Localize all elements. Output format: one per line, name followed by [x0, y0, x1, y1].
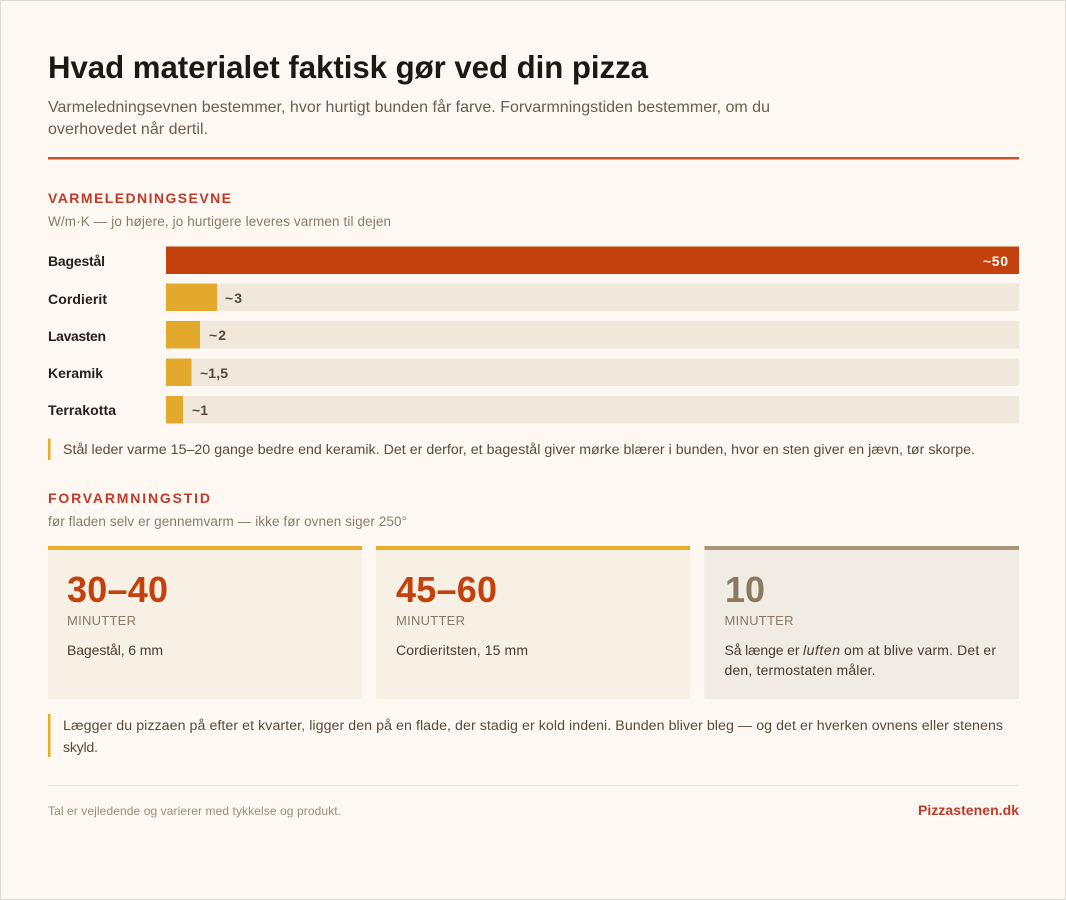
subtitle: Varmeledningsevnen bestemmer, hvor hurtigt bunden får farve. Forvarmningstiden bestemmer, om du: [48, 98, 770, 116]
subtitle: [48, 98, 770, 138]
panel: cordieritsten 45–60 minutter: 45–60: [396, 569, 497, 610]
bar row: Bagestål: [48, 246, 1019, 274]
callout: lægger du pizzaen på: skyld.: [63, 740, 98, 756]
bar chart: varmeledningsevne: [48, 246, 1019, 424]
panel: bagestål 30–40 minutter: MINUTTER: [67, 613, 136, 628]
panel: luften 10 minutter: den, termostaten måler.: [724, 662, 876, 678]
panel: luften 10 minutter: MINUTTER: [724, 613, 794, 628]
panel: luften 10 minutter: Så længe er: [724, 642, 800, 658]
section subtitle: forvarmningstid: før fladen selv er gennemvarm — ikke før ovnen siger 250°: [48, 514, 407, 529]
bar row: Keramik: ~1,5: [200, 365, 228, 381]
panel: cordieritsten 45–60 minutter: MINUTTER: [396, 613, 465, 628]
panel: luften 10 minutter: [704, 546, 1019, 699]
panel: bagestål 30–40 minutter: [48, 546, 362, 699]
panel: cordieritsten 45–60 minutter: Cordieritsten, 15 mm: [396, 642, 528, 658]
bar row: Cordierit: [48, 284, 1019, 311]
bar row: Bagestål: ~50: [983, 253, 1008, 269]
section subtitle: varmeledningsevne: W/m·K — jo højere, jo hurtigere leveres varmen til dejen: [48, 214, 391, 229]
section heading: forvarmningstid: FORVARMNINGSTID: [48, 490, 210, 506]
panel: luften 10 minutter: luften: [803, 642, 840, 658]
footer note: Tal er vejledende og varierer med tykkelse og produkt.: [48, 804, 341, 818]
subtitle: overhovedet når dertil.: [48, 120, 208, 138]
footer brand: Pizzastenen.dk: [918, 802, 1019, 818]
panel: luften 10 minutter: 10: [725, 569, 765, 610]
bar row: Terrakotta: [48, 396, 1019, 424]
bar row: Keramik: [48, 358, 1019, 386]
bar row: Cordierit: Cordierit: [48, 291, 107, 307]
bar row: Terrakotta: Terrakotta: [48, 402, 116, 418]
title: Hvad materialet faktisk gør ved din pizza: [48, 50, 649, 85]
bar row: Lavasten: ~2: [209, 327, 226, 343]
callout: lægger du pizzaen på: Lægger du pizzaen på efter et kvarter, ligger den på en flade, der stadig er kold indeni. Bunden bliver bleg — og det er hverken ovnens eller stenens: [63, 718, 1003, 734]
panel: bagestål 30–40 minutter: Bagestål, 6 mm: [67, 642, 163, 658]
bar row: Keramik: Keramik: [48, 365, 103, 381]
panel: cordieritsten 45–60 minutter: [376, 546, 690, 699]
section heading: varmeledningsevne: VARMELEDNINGSEVNE: [48, 190, 231, 206]
bar row: Bagestål: Bagestål: [48, 253, 105, 269]
panel: bagestål 30–40 minutter: 30–40: [67, 569, 168, 610]
bar row: Lavasten: [48, 321, 1019, 348]
bar row: Lavasten: Lavasten: [48, 328, 106, 344]
bar row: Terrakotta: ~1: [192, 402, 208, 418]
bar row: Cordierit: ~3: [225, 290, 242, 306]
callout: stål leder varme: Stål leder varme 15–20 gange bedre end keramik. Det er derfor, et bagestål giver mørke blærer i bunden, hvor en sten giver en jævn, tør skorpe.: [63, 442, 975, 458]
panel: luften 10 minutter: om at blive varm. Det er: [844, 642, 996, 658]
callout: lægger du pizzaen på: [48, 714, 1003, 757]
